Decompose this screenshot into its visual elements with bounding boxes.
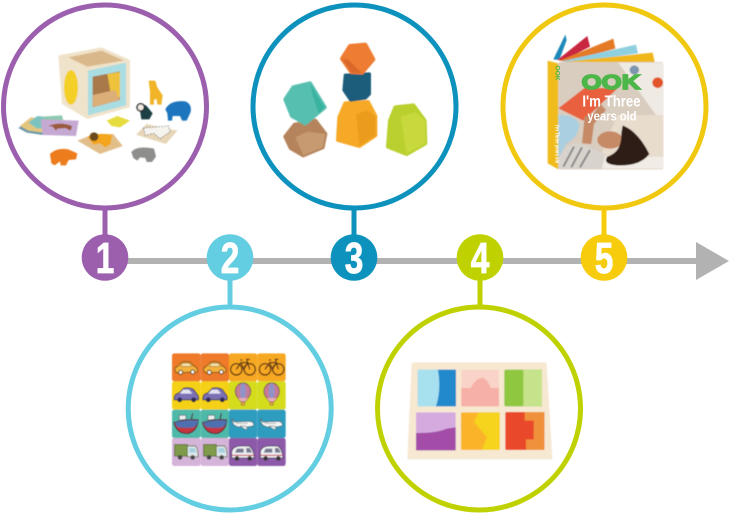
- step 4 number badge: 4: [471, 235, 490, 283]
- panel: step 5 circle with board book: [503, 5, 706, 208]
- timeline axis line: [105, 258, 700, 264]
- step 3 number badge: 3: [345, 235, 363, 283]
- step 1 number badge: [82, 234, 128, 283]
- book title text: I'm Three years old: [553, 125, 559, 164]
- timeline arrowhead: [696, 242, 729, 280]
- illustration: memory card grid: [172, 353, 286, 466]
- panel: step 1 circle with shape sorter toy: [4, 5, 206, 208]
- step 4 number badge: [457, 234, 503, 283]
- step 2 connector: [228, 278, 232, 308]
- step 5 connector: [602, 208, 606, 238]
- step 5 number badge: 5: [595, 235, 613, 283]
- book title text: OOK: [582, 71, 640, 94]
- step 2 number badge: 2: [221, 235, 239, 283]
- step 5 number badge: [581, 234, 627, 283]
- panel: step 2 circle with transport memory cards: [128, 307, 331, 510]
- panel: step 4 circle with wooden shape puzzle: [378, 307, 580, 510]
- step 3 connector: [352, 208, 356, 238]
- illustration: puzzle board: [409, 364, 551, 458]
- illustration: sorter box and animals: [18, 47, 191, 165]
- panel: step 3 circle with balancing stones: [253, 5, 456, 208]
- step 3 number badge: [331, 234, 377, 283]
- illustration: wooden stones: [285, 45, 425, 155]
- book title text: years old: [587, 109, 637, 124]
- step 2 number badge: [207, 234, 253, 283]
- step 1 connector: [102, 208, 108, 238]
- book title text: OOK: [553, 65, 559, 81]
- illustration: OOK board book: [548, 35, 663, 169]
- step 4 connector: [478, 278, 482, 308]
- book title text: I'm Three: [582, 94, 641, 111]
- book title text: [553, 65, 641, 164]
- step 1 number badge: 1: [96, 235, 114, 283]
